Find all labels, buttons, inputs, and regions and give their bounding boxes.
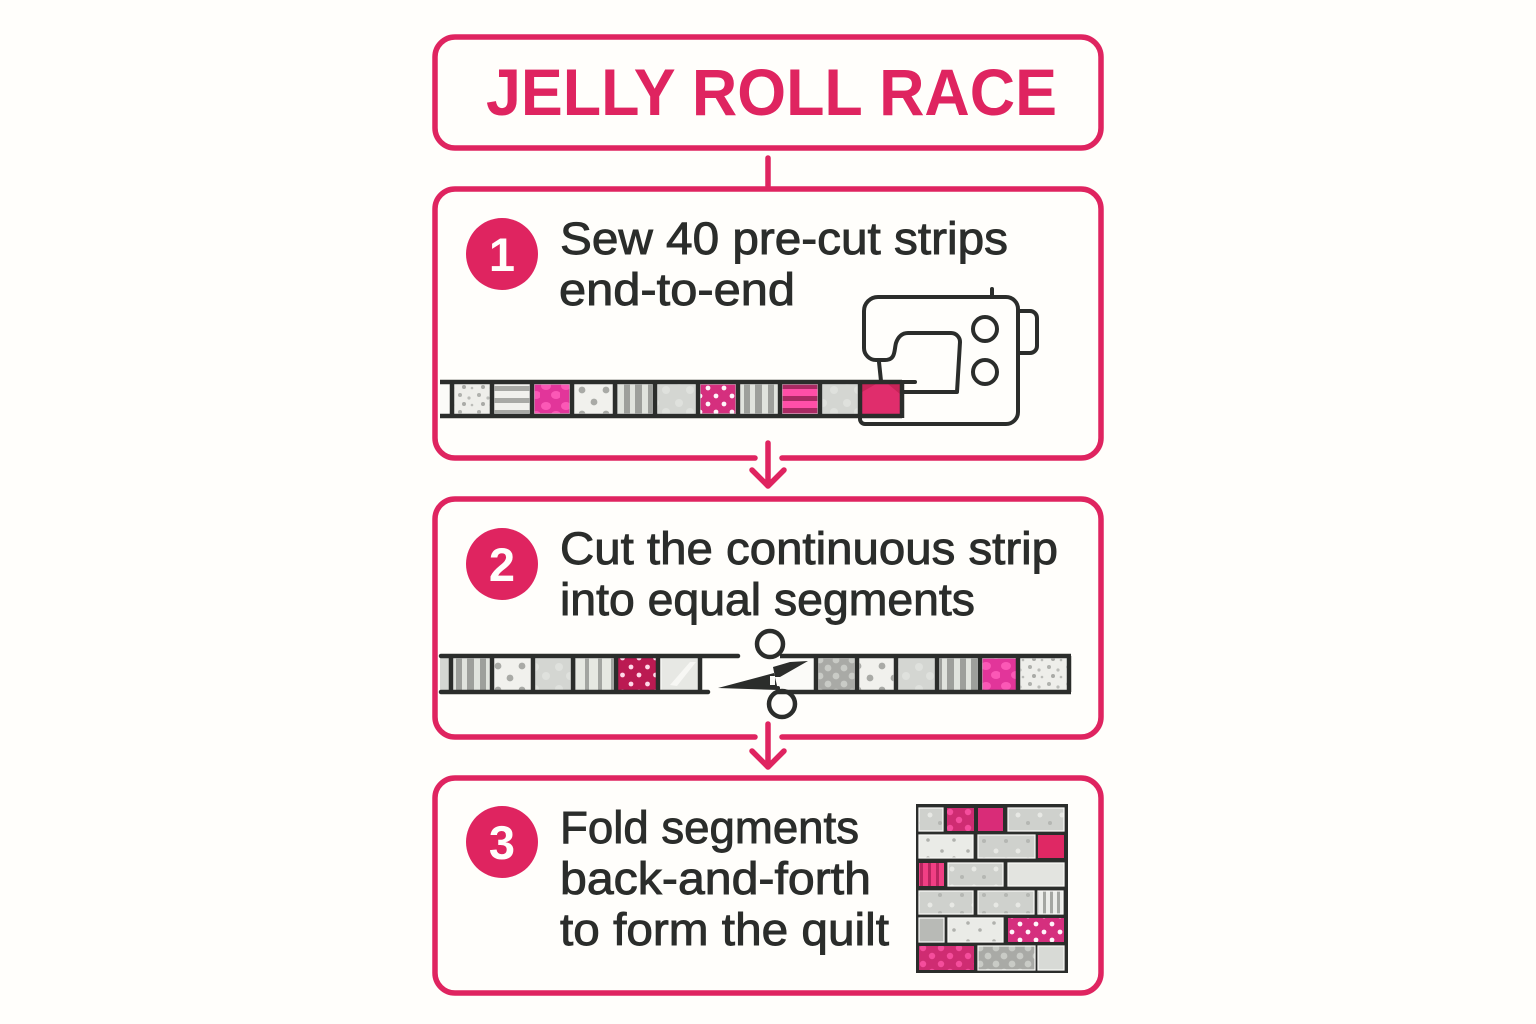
- step 2 text: Cut the continuous strip: [560, 523, 1058, 574]
- number badge 2: 2: [489, 538, 515, 591]
- panel 3 border: [435, 778, 1101, 993]
- quilt illustration: [916, 804, 1068, 973]
- step 1 text: [559, 213, 1008, 315]
- icon: sewing machine: [860, 289, 1037, 424]
- fabric strip: sewn squares: [440, 380, 902, 418]
- step 1 text: end-to-end: [559, 264, 795, 315]
- panel: step 3: [435, 778, 1101, 993]
- step 3 text: Fold segments: [560, 802, 859, 853]
- icon: scissors: [718, 631, 808, 717]
- number badge 1: [466, 218, 538, 290]
- panel: step 1: [435, 189, 1101, 458]
- panel 1 border: [435, 189, 1101, 458]
- panel: step 2: [435, 499, 1101, 737]
- number badge 2: [466, 528, 538, 600]
- arrow: step 2 to step 3: [752, 724, 784, 767]
- step 3 text: [560, 802, 890, 955]
- fabric strip: left part: [440, 656, 738, 692]
- number badge 1: 1: [489, 228, 515, 281]
- step 3 text: back-and-forth: [560, 853, 871, 904]
- title box: [435, 37, 1101, 148]
- step 3 text: to form the quilt: [560, 904, 890, 955]
- fabric strip: right part: [777, 656, 1071, 692]
- arrow: step 1 to step 2: [752, 443, 784, 486]
- number badge 3: 3: [489, 816, 515, 869]
- step 2 text: [560, 523, 1058, 625]
- title: JELLY ROLL RACE: [486, 55, 1057, 129]
- connector: title to step 1: [765, 158, 771, 186]
- step 2 text: into equal segments: [560, 574, 975, 625]
- step 1 text: Sew 40 pre-cut strips: [560, 213, 1008, 264]
- number badge 3: [466, 806, 538, 878]
- panel 2 border: [435, 499, 1101, 737]
